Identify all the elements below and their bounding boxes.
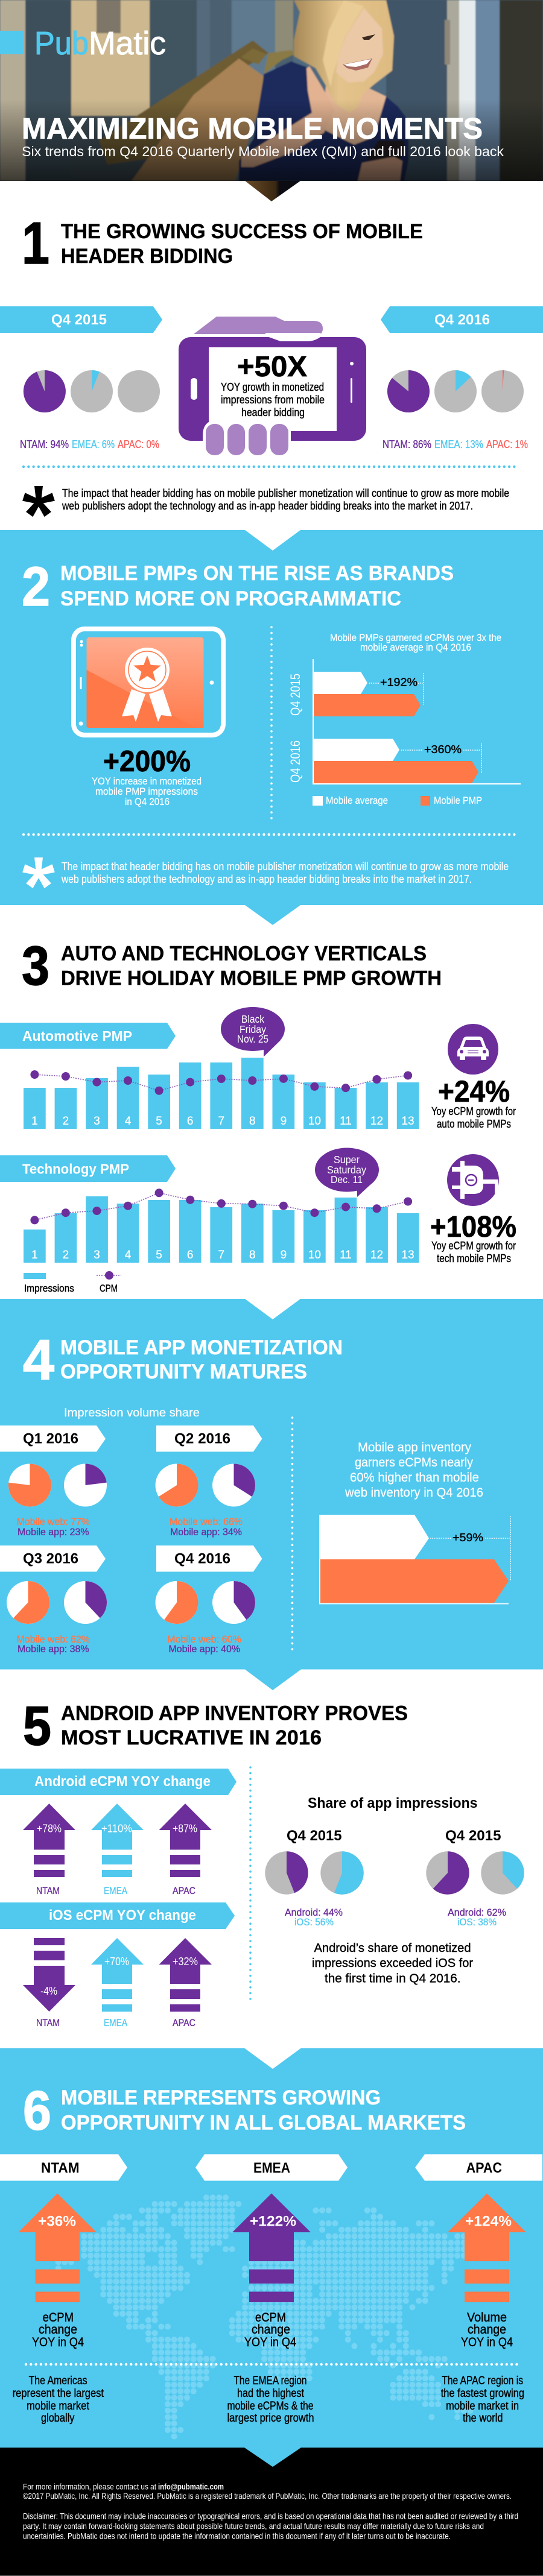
section 5 heading: ANDROID APP INVENTORY PROVES (61, 1702, 408, 1725)
bar chart: +59% mobile app vs web (320, 1515, 510, 1604)
pies: Q4 2015 regions (24, 370, 160, 412)
chart: technology bar numbers: 7 (218, 1249, 224, 1261)
chart: technology CPM line (30, 1189, 412, 1224)
arrow: iOS NTAM -4%: NTAM (36, 2017, 60, 2028)
title: MAXIMIZING MOBILE MOMENTS (22, 113, 483, 145)
ribbon: Q4 2015: Q4 2015 (51, 312, 107, 328)
text: android share statement: the first time in Q4 2016. (325, 1972, 461, 1985)
arrow: Android APAC +87%: +87% (173, 1822, 197, 1834)
column: APAC: YOY in Q4 (461, 2335, 513, 2349)
text: the Americas: globally (41, 2412, 75, 2425)
stat: +108%: +108% (430, 1211, 516, 1243)
section 5 heading (61, 1702, 408, 1749)
chart: automotive bar numbers: 4 (125, 1115, 132, 1128)
icon: phone held in hand with +50X: YOY growth in monetized (221, 381, 324, 393)
panel: section 6 global markets (0, 2048, 543, 2448)
bar chart: mobile average vs PMP eCPM: Q4 2015 (288, 674, 303, 716)
text: the Americas: represent the largest (13, 2387, 104, 2400)
group: Q1 2016 (0, 1425, 107, 1538)
group: share Q4 2015 right: Q4 2015 (445, 1828, 501, 1844)
icon: tablet with award ribbon (71, 627, 226, 737)
bar chart: +59% mobile app vs web: +59% (453, 1532, 483, 1544)
stat: +24%: Yoy eCPM growth for (431, 1105, 516, 1117)
chart: automotive bar numbers: 6 (187, 1115, 193, 1128)
chart: automotive bar numbers: 13 (402, 1115, 414, 1128)
icon: car (448, 1024, 498, 1075)
callout: Super Saturday Dec. 11: Dec. 11 (331, 1173, 363, 1185)
chart: automotive bar numbers: 8 (249, 1115, 256, 1128)
chart legend: impressions and CPM: Impressions (24, 1283, 74, 1294)
text: mobile app eCPM statement: 60% higher than mobile (350, 1471, 479, 1485)
footer disclaimer: uncertainties. PubMatic does not intend to update the information contained in this document if any of it later turns out to be inaccurate. (23, 2531, 451, 2541)
logo: PubMatic: Pub (34, 25, 89, 62)
text: mobile app eCPM statement: garners eCPMs nearly (355, 1456, 473, 1470)
chart legend: impressions and CPM (24, 1271, 121, 1294)
ribbon: Android eCPM YOY change (0, 1769, 237, 1795)
legend: Q4 2016 shares (383, 438, 528, 450)
chart: technology bar numbers: 11 (340, 1249, 352, 1261)
stat: +108% (430, 1211, 516, 1264)
legend: Q4 2015 shares: EMEA: 6% (72, 438, 115, 450)
chart: technology bar numbers: 4 (125, 1249, 132, 1261)
footer disclaimer (23, 2511, 518, 2541)
stat: +24% (431, 1075, 516, 1130)
group: Q2 2016: Mobile app: 34% (170, 1526, 242, 1538)
legend: Q4 2015 shares (20, 438, 159, 450)
text: the APAC region: The APAC region is (442, 2375, 523, 2387)
icon: phone held in hand with +50X: header bidding (241, 406, 305, 418)
panel: section 1 header bidding (0, 210, 543, 517)
text: the APAC region: mobile market in (446, 2400, 519, 2413)
stat: +200%: +200% (103, 745, 191, 778)
stat: +200%: YOY increase in monetized (92, 775, 202, 787)
icon: phone held in hand with +50X (179, 317, 366, 456)
ribbon: Automotive PMP: Automotive PMP (22, 1028, 132, 1044)
column: EMEA: change (252, 2323, 290, 2337)
text: the APAC region (441, 2375, 524, 2425)
chart: technology bar numbers: 13 (402, 1249, 414, 1261)
text: android share statement: impressions exceeded iOS for (312, 1956, 473, 1970)
arrow: Android EMEA +110%: EMEA (104, 1885, 128, 1896)
chart legend: Mobile PMP (434, 795, 482, 806)
note text white (61, 860, 509, 885)
section 3 heading: AUTO AND TECHNOLOGY VERTICALS (61, 942, 427, 965)
section 4 heading: MOBILE APP MONETIZATION (60, 1336, 343, 1359)
column: EMEA: eCPM (255, 2311, 286, 2325)
subtitle: Six trends from Q4 2016 Quarterly Mobile Index (QMI) and full 2016 look back (22, 144, 504, 159)
chart: automotive bar numbers: 10 (308, 1115, 321, 1128)
group: share Q4 2015 left: iOS: 56% (294, 1916, 334, 1928)
callout: Super Saturday Dec. 11: Saturday (327, 1164, 366, 1176)
column: APAC: APAC (466, 2160, 502, 2176)
chart text: Mobile PMPs garnered eCPMs over 3x the (330, 632, 501, 643)
ribbon: Automotive PMP (0, 1023, 176, 1049)
section 1 heading: THE GROWING SUCCESS OF MOBILE (61, 220, 423, 243)
column: NTAM: +36% (38, 2213, 76, 2230)
column: EMEA: EMEA (253, 2160, 290, 2176)
text: the EMEA region: mobile eCPMs & the (227, 2400, 314, 2413)
legend: Q4 2016 shares: EMEA: 13% (434, 438, 483, 450)
bar chart: mobile average vs PMP eCPM: +192% (380, 677, 418, 689)
text: the Americas: The Americas (29, 2375, 87, 2387)
panel: footer (0, 2448, 543, 2576)
section 4 heading (60, 1336, 343, 1383)
section 6 heading: OPPORTUNITY IN ALL GLOBAL MARKETS (61, 2112, 466, 2135)
chart: automotive bar numbers: 5 (156, 1115, 162, 1128)
note text white: web publishers adopt the technology and as in-app header bidding breaks into the market in 2017. (61, 873, 472, 885)
group: Q3 2016: Mobile web: 62% (17, 1634, 90, 1645)
group: Q4 2016 (156, 1545, 262, 1655)
section 2 heading: MOBILE PMPs ON THE RISE AS BRANDS (60, 562, 454, 585)
group: share Q4 2015 left (265, 1828, 364, 1928)
column: APAC: Volume (467, 2311, 507, 2325)
arrow: Android EMEA +110% (91, 1804, 144, 1896)
column: NTAM: YOY in Q4 (32, 2335, 84, 2349)
stat: +24%: auto mobile PMPs (437, 1118, 511, 1130)
section 6 heading (61, 2086, 466, 2135)
column: NTAM: change (39, 2323, 77, 2337)
group: share Q4 2015 left: Android: 44% (285, 1907, 343, 1918)
stat: +24%: +24% (438, 1075, 510, 1108)
panel: section 2 mobile PMPs (0, 530, 543, 925)
column: APAC (415, 2154, 542, 2349)
chart text (330, 632, 501, 653)
section 4 heading: OPPORTUNITY MATURES (60, 1360, 307, 1383)
chart: technology bar numbers: 3 (94, 1249, 100, 1261)
heading: share of app impressions: Share of app impressions (308, 1795, 478, 1811)
chart: technology bar numbers: 6 (187, 1249, 193, 1261)
chart text: mobile average in Q4 2016 (360, 642, 471, 653)
callout: Super Saturday Dec. 11 (315, 1148, 379, 1197)
chart: technology bar numbers (31, 1249, 414, 1261)
note text (62, 487, 509, 512)
group: share Q4 2015 left: Q4 2015 (287, 1828, 341, 1844)
column: NTAM: eCPM (43, 2311, 74, 2325)
text: the EMEA region: largest price growth (227, 2412, 314, 2425)
chart: automotive impressions bars (24, 1058, 419, 1129)
group: Q1 2016: Q1 2016 (23, 1430, 78, 1447)
chart: technology bar numbers: 2 (63, 1249, 69, 1261)
section 6 heading: MOBILE REPRESENTS GROWING (61, 2086, 381, 2109)
group: Q2 2016 (156, 1425, 262, 1538)
legend: Q4 2016 shares: NTAM: 86% (383, 438, 431, 450)
text: mobile app eCPM statement: web inventory in Q4 2016 (345, 1486, 483, 1500)
arrow: iOS APAC +32% (159, 1938, 212, 2028)
arrow: iOS EMEA +70%: +70% (104, 1956, 129, 1968)
group: Q4 2016: Mobile web: 60% (167, 1634, 241, 1645)
group: Q4 2016: Mobile app: 40% (169, 1643, 240, 1655)
text: the EMEA region: had the highest (237, 2387, 305, 2400)
group: Q3 2016: Q3 2016 (23, 1551, 78, 1567)
group: share Q4 2015 right: iOS: 38% (457, 1916, 497, 1928)
chart: technology bar numbers: 5 (156, 1249, 162, 1261)
chart: automotive bar numbers: 7 (218, 1115, 224, 1128)
ribbon: Q4 2015 (0, 306, 162, 333)
icon: phone held in hand with +50X: +50X (237, 351, 307, 383)
chart legend (313, 795, 482, 806)
callout: Black Friday Nov. 25 (221, 1007, 285, 1056)
panel: section 4 mobile app (0, 1299, 543, 1690)
footer contact and copyright: info@pubmatic.com (158, 2481, 224, 2491)
text: android share statement (312, 1941, 473, 1985)
arrow: iOS NTAM -4%: -4% (40, 1985, 57, 1997)
chart: automotive bar numbers: 1 (31, 1115, 38, 1128)
group: share Q4 2015 right (426, 1828, 524, 1928)
chart: technology bar numbers: 10 (308, 1249, 321, 1261)
section 2 number: 2 (22, 556, 50, 617)
section 2 heading: SPEND MORE ON PROGRAMMATIC (60, 587, 401, 610)
callout: Black Friday Nov. 25: Black (241, 1013, 264, 1025)
arrow: Android NTAM +78% (23, 1804, 75, 1896)
column: NTAM (0, 2154, 127, 2349)
text: mobile app eCPM statement: Mobile app inventory (358, 1441, 471, 1454)
column: NTAM: NTAM (41, 2160, 80, 2176)
stat: +200%: in Q4 2016 (125, 796, 170, 807)
stat: +108%: Yoy eCPM growth for (431, 1240, 516, 1252)
text: mobile app eCPM statement (345, 1441, 483, 1500)
chart: technology bar numbers: 12 (370, 1249, 383, 1261)
stat: +200%: mobile PMP impressions (95, 786, 198, 797)
arrow: iOS EMEA +70%: EMEA (104, 2017, 128, 2028)
section 1 number: 1 (22, 210, 49, 276)
ribbon: iOS eCPM YOY change (0, 1902, 235, 1929)
icon: plug (447, 1154, 499, 1206)
group: Q2 2016: Q2 2016 (174, 1430, 230, 1447)
arrow: iOS NTAM -4% (23, 1938, 75, 2028)
ribbon: Q4 2016: Q4 2016 (434, 312, 490, 328)
icon: phone held in hand with +50X: impressions from mobile (221, 394, 325, 406)
ribbon: Technology PMP: Technology PMP (22, 1161, 129, 1177)
ribbon: iOS eCPM YOY change: iOS eCPM YOY change (49, 1907, 196, 1924)
icon: asterisk (22, 486, 55, 517)
logo: PubMatic: Matic (89, 25, 166, 62)
ribbon: Android eCPM YOY change: Android eCPM YOY change (34, 1773, 211, 1790)
callout: Black Friday Nov. 25: Nov. 25 (237, 1033, 268, 1045)
chart: automotive bar numbers (31, 1115, 414, 1128)
chart: technology bar numbers: 1 (31, 1249, 38, 1261)
section 3 number: 3 (22, 935, 49, 997)
bar chart: mobile average vs PMP eCPM: Q4 2016 (288, 740, 303, 783)
group: Q4 2016: Q4 2016 (174, 1551, 230, 1567)
column: APAC: +124% (465, 2213, 512, 2230)
column: EMEA (195, 2154, 348, 2349)
chart: technology impressions bars (24, 1196, 419, 1263)
section 6 number: 6 (23, 2080, 51, 2142)
legend: Q4 2015 shares: APAC: 0% (118, 438, 159, 450)
section 4 number: 4 (23, 1328, 54, 1391)
text: the EMEA region: The EMEA region (234, 2375, 306, 2387)
arrow: iOS APAC +32%: +32% (173, 1956, 198, 1968)
icon: asterisk white (22, 857, 55, 888)
arrow: iOS APAC +32%: APAC (173, 2017, 195, 2028)
text: the Americas (13, 2375, 104, 2425)
chart: automotive CPM line (30, 1070, 412, 1095)
chart legend: impressions and CPM: CPM (100, 1283, 118, 1294)
chart: automotive bar numbers: 12 (370, 1115, 383, 1128)
group: Q1 2016: Mobile web: 77% (17, 1516, 90, 1527)
bar chart: mobile average vs PMP eCPM (288, 659, 521, 784)
callout: Super Saturday Dec. 11: Super (334, 1154, 360, 1166)
chart: automotive bar numbers: 9 (281, 1115, 287, 1128)
section 5 number: 5 (23, 1696, 51, 1757)
column: EMEA: +122% (250, 2213, 296, 2230)
group: Q3 2016 (0, 1545, 107, 1655)
chart: technology bar numbers: 9 (281, 1249, 287, 1261)
bar chart: mobile average vs PMP eCPM: +360% (424, 743, 462, 756)
arrow: iOS EMEA +70% (91, 1938, 144, 2028)
chart: automotive bar numbers: 11 (340, 1115, 352, 1128)
arrow: Android EMEA +110%: +110% (101, 1822, 132, 1834)
group: Q3 2016: Mobile app: 38% (17, 1643, 89, 1655)
section 1 heading: HEADER BIDDING (61, 245, 233, 268)
note text: web publishers adopt the technology and as in-app header bidding breaks into the market in 2017. (62, 500, 473, 512)
pies: Q4 2016 regions (387, 370, 524, 412)
section 1 heading (61, 220, 423, 268)
text: android share statement: Android’s share of monetized (314, 1941, 471, 1955)
footer contact and copyright: For more information, please contact us at (23, 2481, 156, 2491)
ribbon: Technology PMP (0, 1155, 176, 1182)
section 3 heading (61, 942, 442, 990)
legend: Q4 2016 shares: APAC: 1% (486, 438, 528, 450)
section 3 heading: DRIVE HOLIDAY MOBILE PMP GROWTH (61, 967, 442, 990)
chart: automotive bar numbers: 2 (63, 1115, 69, 1128)
arrow: Android NTAM +78%: NTAM (36, 1885, 60, 1896)
panel: section 5 android (0, 1696, 524, 2028)
column: EMEA: YOY in Q4 (244, 2335, 296, 2349)
ribbon: Q4 2016 (381, 306, 543, 333)
callout: Black Friday Nov. 25: Friday (240, 1023, 266, 1035)
text: the APAC region: the fastest growing (441, 2387, 524, 2400)
text: the Americas: mobile market (27, 2400, 90, 2413)
world map dots (59, 2197, 471, 2437)
group: Q1 2016: Mobile app: 23% (17, 1526, 89, 1538)
group: share Q4 2015 right: Android: 62% (448, 1907, 506, 1918)
text: the APAC region: the world (463, 2412, 503, 2425)
logo: PubMatic (0, 25, 166, 62)
footer contact and copyright (23, 2481, 512, 2501)
text: the EMEA region (227, 2375, 314, 2425)
subheading: impression volume share: Impression volume share (64, 1407, 200, 1419)
chart: automotive bar numbers: 3 (94, 1115, 100, 1128)
arrow: Android NTAM +78%: +78% (37, 1822, 62, 1834)
panel: section 3 verticals (0, 935, 516, 1294)
section 2 heading (60, 562, 454, 610)
group: Q2 2016: Mobile web: 66% (170, 1516, 243, 1527)
chart: technology bar numbers: 8 (249, 1249, 256, 1261)
column: APAC: change (468, 2323, 506, 2337)
stat: +200% (92, 745, 202, 807)
arrow: Android APAC +87%: APAC (173, 1885, 195, 1896)
legend: Q4 2015 shares: NTAM: 94% (20, 438, 69, 450)
stat: +108%: tech mobile PMPs (437, 1252, 511, 1264)
arrow: Android APAC +87% (159, 1804, 212, 1896)
chart legend: Mobile average (326, 795, 388, 806)
section 5 heading: MOST LUCRATIVE IN 2016 (61, 1726, 322, 1749)
hero photo: woman with shopping bags (0, 0, 543, 201)
